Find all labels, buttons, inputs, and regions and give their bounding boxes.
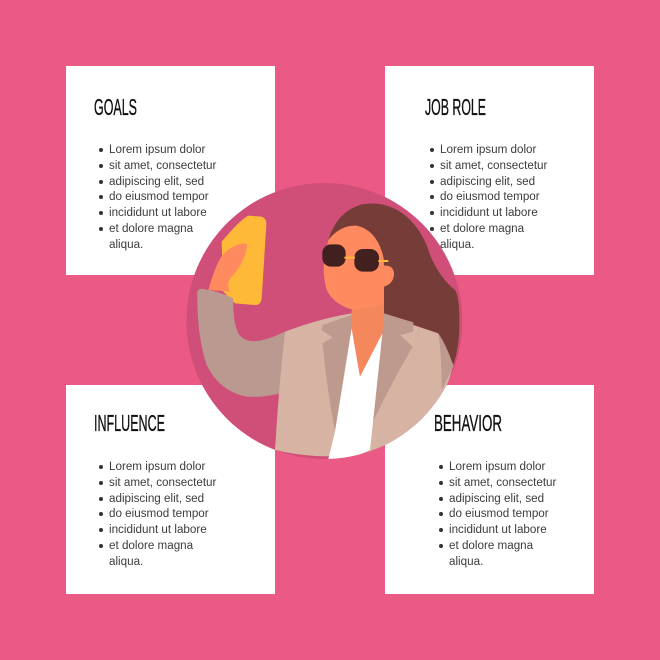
right sleeve [438, 333, 453, 390]
text block: influence list: Lorem ipsum dolor [109, 460, 205, 473]
text block: influence list: do eiusmod tempor [109, 507, 209, 520]
text block: goals list: Lorem ipsum dolor [109, 143, 205, 156]
hair [328, 203, 459, 367]
jacket body [275, 313, 453, 456]
text block: behavior list: adipiscing elit, sed [449, 492, 544, 504]
text block: influence list: aliqua. [109, 554, 143, 568]
text block: job role list: incididunt ut labore [440, 206, 538, 219]
text block: job role list: sit amet, consectetur [440, 159, 547, 172]
heading: goals: GOALS [94, 94, 137, 120]
text block: job role list [430, 143, 548, 250]
text block: behavior list: incididunt ut labore [449, 523, 547, 536]
white shirt [328, 328, 382, 462]
text block: goals list [99, 143, 216, 250]
text block: influence list: et dolore magna [109, 539, 193, 552]
text block: behavior list: aliqua. [449, 554, 483, 568]
left lapel [322, 315, 352, 432]
text block: job role list: Lorem ipsum dolor [440, 143, 536, 156]
icon: yellow card [222, 216, 266, 305]
text block: influence list [99, 460, 216, 568]
heading: job role: JOB ROLE [425, 94, 486, 120]
face [324, 226, 394, 309]
text block: influence list: adipiscing elit, sed [109, 492, 204, 504]
illustration: woman with sunglasses holding a card, in a circle [186, 183, 462, 459]
text block: goals list: adipiscing elit, sed [109, 174, 204, 188]
text block: behavior list: do eiusmod tempor [449, 507, 549, 520]
text block: job role list: et dolore magna [440, 222, 524, 235]
text block: goals list: incididunt ut labore [109, 206, 207, 219]
right lapel [373, 313, 414, 422]
hand [208, 243, 247, 292]
neck [352, 304, 384, 376]
text block: behavior list [439, 460, 556, 568]
text block: behavior list: sit amet, consectetur [449, 476, 556, 489]
text block: influence list: sit amet, consectetur [109, 476, 216, 489]
text block: goals list: do eiusmod tempor [109, 190, 209, 203]
text block: influence list: incididunt ut labore [109, 523, 207, 536]
text block: behavior list: et dolore magna [449, 539, 533, 552]
jacket sleeve [197, 289, 285, 397]
text block: job role list: adipiscing elit, sed [440, 174, 535, 188]
text block: behavior list: Lorem ipsum dolor [449, 460, 545, 473]
text block: goals list: sit amet, consectetur [109, 159, 216, 172]
text block: job role list: do eiusmod tempor [440, 190, 540, 203]
sunglasses [322, 244, 388, 272]
text block: job role list: aliqua. [440, 238, 474, 250]
heading: influence: INFLUENCE [94, 410, 165, 436]
text block: goals list: et dolore magna [109, 222, 193, 235]
heading: behavior: BEHAVIOR [434, 410, 502, 436]
text block: goals list: aliqua. [109, 238, 143, 250]
